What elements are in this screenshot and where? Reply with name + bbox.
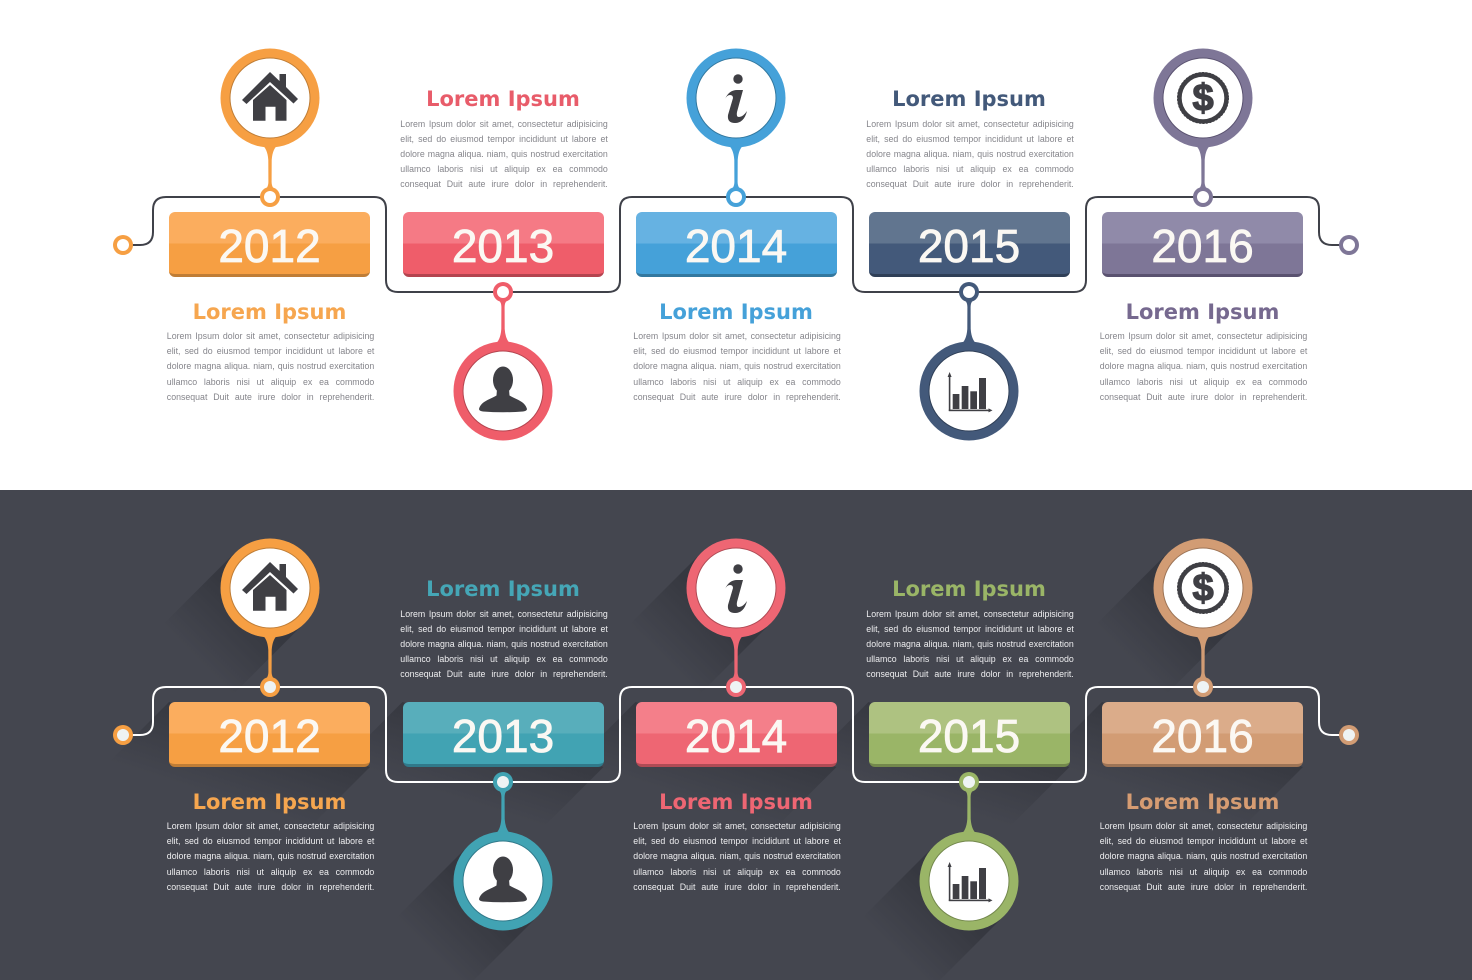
icon: person pin — [454, 772, 552, 930]
body text: Lorem Ipsum dolor sit amet, consectetur adipisicing — [633, 821, 841, 831]
body text: consequat Duit aute irure dolor in reprehenderit. — [167, 882, 374, 892]
body text: ullamco laboris nisi ut aliquip ex ea commodo — [866, 654, 1074, 664]
panel: light timeline — [0, 0, 1472, 490]
heading: Lorem Ipsum — [659, 300, 813, 324]
icon: bar chart pin — [920, 772, 1018, 930]
body text: Lorem Ipsum dolor sit amet, consectetur adipisicing — [1100, 821, 1307, 831]
year badge: 2013 — [452, 220, 554, 272]
body text: dolore magna aliqua. niam, quis nostrud exercitation — [633, 851, 841, 861]
body text: dolore magna aliqua. niam, quis nostrud exercitation — [167, 361, 374, 371]
milestone 2016 — [1100, 538, 1308, 892]
year badge: 2015 — [918, 220, 1020, 272]
body text: ullamco laboris nisi ut aliquip ex ea commodo — [633, 867, 841, 877]
panel: dark timeline — [0, 490, 1472, 980]
end dot — [1339, 725, 1359, 745]
long shadows — [143, 554, 1302, 960]
connector line — [132, 686, 1340, 783]
body text: Lorem Ipsum dolor sit amet, consectetur adipisicing — [866, 118, 1074, 128]
icon: info pin — [686, 538, 786, 697]
year badge — [636, 702, 836, 767]
body text: consequat Duit aute irure dolor in reprehenderit. — [167, 392, 374, 402]
body text: Lorem Ipsum dolor sit amet, consectetur adipisicing — [400, 608, 608, 618]
body text: dolore magna aliqua. niam, quis nostrud exercitation — [1100, 361, 1307, 371]
icon: dollar pin — [1154, 538, 1252, 697]
body text: dolore magna aliqua. niam, quis nostrud exercitation — [400, 639, 608, 649]
body text: elit, sed do eiusmod tempor incididunt ut labore et — [866, 134, 1074, 144]
start dot — [113, 235, 133, 255]
heading: Lorem Ipsum — [426, 577, 580, 601]
icon: dollar pin: $ — [1192, 568, 1213, 610]
body text: elit, sed do eiusmod tempor incididunt ut labore et — [167, 346, 374, 356]
milestone 2014 — [633, 48, 841, 402]
body text: elit, sed do eiusmod tempor incididunt ut labore et — [1100, 836, 1307, 846]
milestone 2012 — [167, 48, 374, 402]
body text: consequat Duit aute irure dolor in reprehenderit. — [400, 179, 608, 189]
year badge: 2014 — [685, 710, 787, 762]
body text: ullamco laboris nisi ut aliquip ex ea commodo — [167, 377, 374, 387]
end dot — [1339, 235, 1359, 255]
heading: Lorem Ipsum — [892, 577, 1046, 601]
body text: ullamco laboris nisi ut aliquip ex ea commodo — [633, 377, 841, 387]
year badge — [868, 702, 1070, 767]
year badge — [636, 212, 836, 277]
heading: Lorem Ipsum — [892, 87, 1046, 111]
year badge — [1102, 702, 1303, 767]
year badge — [868, 212, 1070, 277]
year badge: 2015 — [918, 710, 1020, 762]
icon: dollar pin — [1154, 48, 1252, 207]
body text: ullamco laboris nisi ut aliquip ex ea commodo — [400, 654, 608, 664]
body text: consequat Duit aute irure dolor in reprehenderit. — [633, 882, 841, 892]
body text: ullamco laboris nisi ut aliquip ex ea commodo — [167, 867, 374, 877]
body text: Lorem Ipsum dolor sit amet, consectetur adipisicing — [167, 331, 374, 341]
year badge — [1102, 212, 1303, 277]
body text: dolore magna aliqua. niam, quis nostrud exercitation — [866, 149, 1074, 159]
body text: elit, sed do eiusmod tempor incididunt ut labore et — [400, 624, 608, 634]
year badge: 2012 — [218, 220, 321, 272]
year badge: 2013 — [452, 710, 554, 762]
year badge — [402, 212, 604, 277]
body text — [167, 331, 374, 402]
start dot — [113, 725, 133, 745]
body text: elit, sed do eiusmod tempor incididunt ut labore et — [400, 134, 608, 144]
year badge — [169, 702, 370, 767]
body text: elit, sed do eiusmod tempor incididunt ut labore et — [167, 836, 374, 846]
milestone 2012 — [167, 538, 374, 892]
body text: dolore magna aliqua. niam, quis nostrud exercitation — [167, 851, 374, 861]
body text: Lorem Ipsum dolor sit amet, consectetur adipisicing — [1100, 331, 1307, 341]
heading: Lorem Ipsum — [193, 790, 346, 814]
icon: house pin — [220, 538, 320, 697]
milestone 2015 — [866, 577, 1074, 930]
year badge: 2012 — [218, 710, 321, 762]
body text: elit, sed do eiusmod tempor incididunt ut labore et — [866, 624, 1074, 634]
milestone 2014 — [633, 538, 841, 892]
body text: dolore magna aliqua. niam, quis nostrud exercitation — [633, 361, 841, 371]
year badge — [169, 212, 370, 277]
body text — [633, 331, 841, 402]
heading: Lorem Ipsum — [659, 790, 813, 814]
body text: ullamco laboris nisi ut aliquip ex ea commodo — [400, 164, 608, 174]
year badge: 2016 — [1151, 220, 1254, 272]
body text: consequat Duit aute irure dolor in reprehenderit. — [866, 669, 1074, 679]
body text: ullamco laboris nisi ut aliquip ex ea commodo — [1100, 867, 1307, 877]
body text: Lorem Ipsum dolor sit amet, consectetur adipisicing — [400, 118, 608, 128]
icon: person pin — [454, 282, 552, 440]
body text — [400, 118, 608, 189]
icon: dollar pin: $ — [1192, 78, 1213, 120]
heading: Lorem Ipsum — [1126, 790, 1279, 814]
body text — [1100, 821, 1308, 892]
body text: consequat Duit aute irure dolor in reprehenderit. — [633, 392, 841, 402]
icon: info pin — [686, 48, 786, 207]
milestone 2016 — [1100, 48, 1308, 402]
heading: Lorem Ipsum — [193, 300, 346, 324]
body text: elit, sed do eiusmod tempor incididunt ut labore et — [633, 836, 841, 846]
body text: dolore magna aliqua. niam, quis nostrud exercitation — [866, 639, 1074, 649]
body text: Lorem Ipsum dolor sit amet, consectetur adipisicing — [633, 331, 841, 341]
year badge: 2014 — [685, 220, 787, 272]
year badge: 2016 — [1151, 710, 1254, 762]
body text — [400, 608, 608, 679]
body text: Lorem Ipsum dolor sit amet, consectetur adipisicing — [167, 821, 374, 831]
body text — [866, 118, 1074, 189]
year badge — [402, 702, 604, 767]
body text — [1100, 331, 1308, 402]
body text: dolore magna aliqua. niam, quis nostrud exercitation — [1100, 851, 1307, 861]
body text: consequat Duit aute irure dolor in reprehenderit. — [400, 669, 608, 679]
connector line — [132, 196, 1340, 293]
icon: bar chart pin — [920, 282, 1018, 440]
milestone 2013 — [400, 87, 608, 440]
body text: dolore magna aliqua. niam, quis nostrud exercitation — [400, 149, 608, 159]
body text: Lorem Ipsum dolor sit amet, consectetur adipisicing — [866, 608, 1074, 618]
body text — [866, 608, 1074, 679]
body text: consequat Duit aute irure dolor in reprehenderit. — [866, 179, 1074, 189]
heading: Lorem Ipsum — [426, 87, 580, 111]
body text: elit, sed do eiusmod tempor incididunt ut labore et — [633, 346, 841, 356]
body text — [633, 821, 841, 892]
body text: consequat Duit aute irure dolor in reprehenderit. — [1100, 882, 1307, 892]
body text: ullamco laboris nisi ut aliquip ex ea commodo — [866, 164, 1074, 174]
body text: ullamco laboris nisi ut aliquip ex ea commodo — [1100, 377, 1307, 387]
heading: Lorem Ipsum — [1126, 300, 1279, 324]
milestone 2013 — [400, 577, 608, 930]
icon: house pin — [220, 48, 320, 207]
milestone 2015 — [866, 87, 1074, 440]
body text — [167, 821, 374, 892]
body text: elit, sed do eiusmod tempor incididunt ut labore et — [1100, 346, 1307, 356]
body text: consequat Duit aute irure dolor in reprehenderit. — [1100, 392, 1307, 402]
